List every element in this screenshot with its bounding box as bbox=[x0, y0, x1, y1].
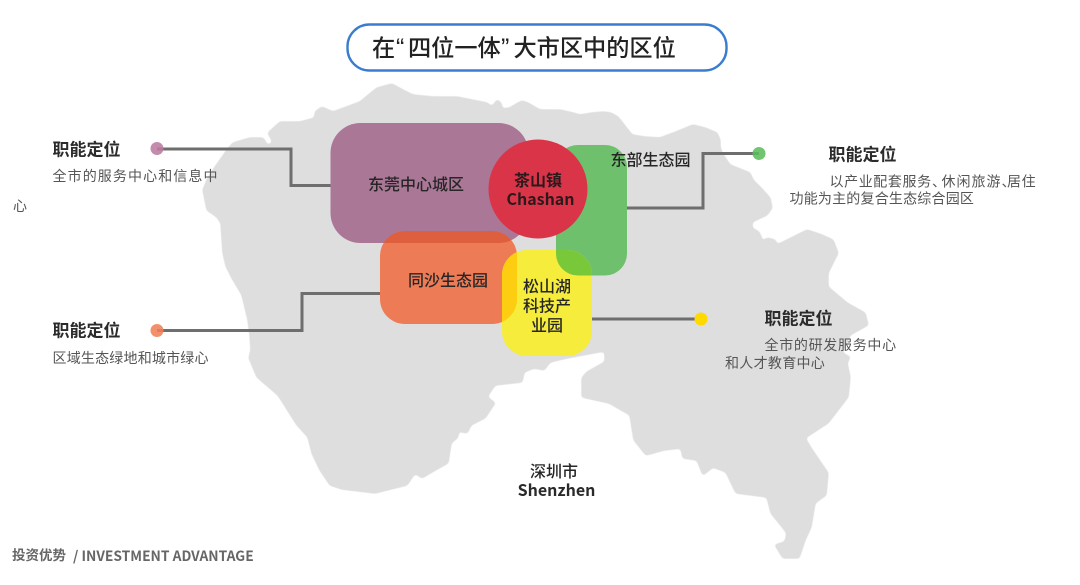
zone: Songshan Lake science park: 松山湖 bbox=[523, 273, 571, 297]
text block: upper right function: 、 bbox=[932, 172, 947, 192]
label: Shenzhen city: Shenzhen bbox=[518, 477, 595, 501]
text block: upper left function: 全市的服务中心和信息中 bbox=[52, 166, 219, 186]
text block: lower right function bbox=[725, 304, 897, 373]
text block: upper right function: 以产业配套服务 bbox=[830, 172, 932, 192]
text block: lower right function: 全市的研发服务中心 bbox=[764, 335, 897, 355]
title box: 在 bbox=[372, 29, 395, 63]
title box: 四位一体 bbox=[408, 29, 501, 63]
label: Shenzhen city: 深圳市 bbox=[530, 458, 578, 482]
text block: upper left function bbox=[13, 136, 219, 216]
text block: upper right function: 休闲旅游 bbox=[942, 172, 1002, 192]
text block: upper right function: 职能定位 bbox=[828, 140, 896, 166]
connector: yellow to right label bbox=[591, 318, 701, 320]
text block: upper left function: 职能定位 bbox=[52, 136, 120, 160]
footer: section tag: 投资优势 bbox=[12, 544, 66, 564]
text block: lower right function: 和人才教育中心 bbox=[725, 353, 825, 373]
zone: Dongguan central district: 东莞中心城区 bbox=[368, 171, 464, 195]
title box bbox=[348, 24, 726, 70]
dot: green bbox=[752, 147, 766, 160]
text block: upper right function: 居住 bbox=[1007, 172, 1036, 192]
zone: Eastern eco park: 东部生态园 bbox=[610, 146, 691, 170]
footer: section tag: / INVESTMENT ADVANTAGE bbox=[73, 545, 254, 565]
text block: upper left function: 心 bbox=[13, 196, 27, 216]
text block: lower right function: 职能定位 bbox=[764, 304, 832, 330]
zone: Tongsha eco park bbox=[380, 231, 517, 324]
zone: Songshan Lake science park bbox=[502, 250, 592, 356]
zone: Songshan Lake science park: 业园 bbox=[531, 312, 563, 336]
zone: Eastern eco park bbox=[556, 145, 691, 276]
text block: lower left function bbox=[52, 316, 209, 368]
text block: upper right function bbox=[790, 140, 1036, 208]
text block: lower left function: 区域生态绿地和城市绿心 bbox=[52, 348, 209, 368]
dot: purple bbox=[150, 142, 164, 155]
title box: “ bbox=[396, 34, 404, 62]
connector: orange to left label bbox=[157, 294, 381, 330]
dot: orange bbox=[150, 324, 164, 337]
zone: Dongguan central district bbox=[330, 123, 528, 243]
text block: upper right function: 、 bbox=[1002, 172, 1016, 192]
dot: yellow bbox=[694, 312, 708, 326]
connector: purple to left label bbox=[157, 149, 331, 186]
zone: Chashan town circle bbox=[488, 140, 588, 238]
connector: green to right label bbox=[626, 154, 759, 208]
zone: Songshan Lake science park: 科技产 bbox=[523, 292, 571, 316]
title box: ” bbox=[501, 34, 509, 62]
zone: Tongsha eco park: 同沙生态园 bbox=[408, 267, 488, 291]
text block: lower left function: 职能定位 bbox=[52, 316, 120, 342]
zone: Chashan town circle: Chashan bbox=[506, 186, 575, 210]
label: Shenzhen city bbox=[518, 458, 595, 501]
zone: Chashan town circle: 茶山镇 bbox=[514, 167, 562, 191]
text block: upper right function: 功能为主的复合生态综合园区 bbox=[790, 188, 974, 208]
title box: 大市区中的区位 bbox=[514, 29, 676, 63]
map: Dongguan region silhouette bbox=[203, 84, 868, 558]
